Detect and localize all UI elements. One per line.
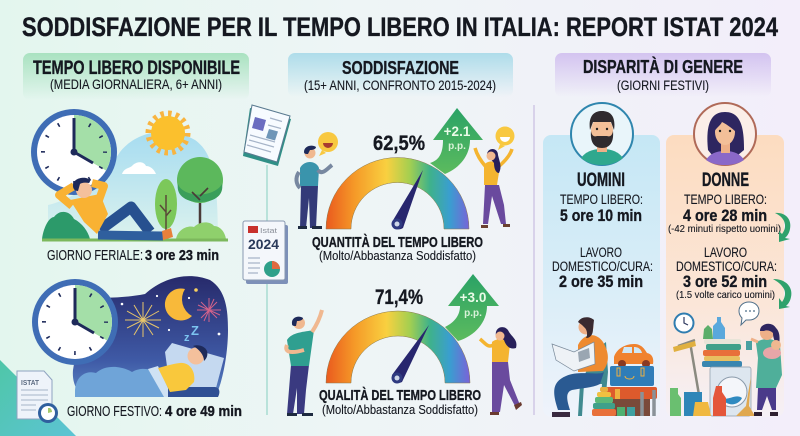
icon: clock holiday — [32, 279, 118, 365]
icon: ISTAT document: ISTAT — [21, 378, 39, 387]
arrow: +3.0 p.p.: p.p. — [464, 308, 482, 319]
card: uomini — [543, 135, 660, 417]
card: uomini: LAVORO — [580, 245, 622, 260]
label: holiday time: 4 ore 49 min — [165, 404, 242, 420]
label: qualità: QUALITÀ DEL TEMPO LIBERO — [319, 387, 481, 404]
label: holiday time: GIORNO FESTIVO: — [67, 404, 162, 420]
panel heading: disparità — [555, 53, 771, 97]
arrow: +3.0 p.p. — [445, 274, 499, 341]
icon: ISTAT document — [17, 371, 58, 423]
avatar: woman — [694, 103, 756, 165]
card: donne — [666, 135, 784, 417]
illustration: holiday night scene: Z — [191, 323, 199, 338]
arrow: domestic work gap — [773, 279, 791, 309]
gauge: qualità — [326, 311, 470, 384]
illustration: relaxing man — [59, 178, 173, 240]
panel: tempo libero disponibile — [17, 53, 249, 423]
panel heading: disparità: (GIORNI FESTIVI) — [617, 78, 709, 93]
illustration: woman with housework — [670, 302, 782, 416]
arrow: +2.1 p.p. — [430, 108, 483, 174]
card: donne: DOMESTICO/CURA: — [676, 259, 777, 274]
icon: report document — [243, 105, 291, 166]
panel heading: tempo libero: (MEDIA GIORNALIERA, 6+ ANNI) — [50, 77, 222, 92]
illustration: holiday night scene: z — [184, 332, 190, 344]
label: quantità: (Molto/Abbastanza Soddisfatto) — [319, 248, 476, 263]
panel heading: disparità: DISPARITÀ DI GENERE — [583, 56, 743, 77]
panel heading: soddisfazione: (15+ ANNI, CONFRONTO 2015-2024) — [304, 78, 496, 93]
arrow: +3.0 p.p.: +3.0 — [460, 290, 486, 305]
panel heading: soddisfazione — [288, 53, 513, 97]
card: donne: (1.5 volte carico uomini) — [676, 289, 775, 301]
panel: disparità di genere — [543, 53, 791, 417]
label: quantità: QUANTITÀ DEL TEMPO LIBERO — [312, 234, 483, 251]
gauge: quantità — [326, 158, 469, 230]
icon: Istat 2024 report: 2024 — [248, 237, 279, 252]
card: donne: 4 ore 28 min — [683, 207, 767, 225]
card: donne: TEMPO LIBERO: — [684, 192, 767, 207]
arrow: free time gap — [775, 213, 790, 242]
panel: soddisfazione — [286, 53, 522, 417]
illustration: man reading — [552, 317, 657, 417]
illustration: weekday park scene — [42, 114, 228, 240]
label: qualità: (Molto/Abbastanza Soddisfatto) — [322, 402, 478, 417]
illustration: holiday night scene — [73, 276, 228, 397]
value: 71,4%: 71,4% — [375, 286, 423, 309]
person: woman with phone — [480, 327, 522, 415]
icon: Istat 2024 report — [243, 221, 288, 284]
card: uomini: TEMPO LIBERO: — [560, 192, 643, 207]
column divider right — [533, 105, 535, 415]
illustration: sleeping man — [75, 343, 224, 397]
card: donne: (-42 minuti rispetto uomini) — [668, 224, 781, 235]
icon: Istat 2024 report: Istat — [260, 226, 278, 235]
column divider left — [266, 165, 268, 415]
card: uomini: 5 ore 10 min — [560, 207, 642, 225]
panel heading: tempo libero: TEMPO LIBERO DISPONIBILE — [33, 58, 240, 79]
arrow: +2.1 p.p.: +2.1 — [444, 124, 471, 139]
person: woman cheering — [475, 126, 514, 228]
card: donne: 3 ore 52 min — [683, 273, 767, 291]
value: 62,5%: 62,5% — [373, 132, 425, 155]
icon: clock weekday — [31, 109, 117, 195]
corner accent — [0, 360, 76, 436]
label: quantità — [312, 234, 483, 263]
person: man raising arm — [286, 310, 322, 416]
label: weekday time: GIORNO FERIALE: — [47, 248, 143, 264]
card: uomini: 2 ore 35 min — [559, 273, 643, 291]
arrow: +2.1 p.p.: p.p. — [448, 141, 466, 152]
card: donne: DONNE — [702, 170, 749, 191]
panel heading: soddisfazione: SODDISFAZIONE — [342, 57, 459, 78]
card: uomini: UOMINI — [577, 170, 625, 191]
card: donne: LAVORO — [704, 245, 747, 260]
person: man with teal sweater — [296, 132, 338, 229]
label: weekday time: 3 ore 23 min — [145, 248, 219, 264]
label: qualità — [319, 387, 481, 417]
avatar: man — [571, 103, 633, 165]
panel heading: tempo libero — [23, 53, 249, 100]
card: uomini: DOMESTICO/CURA: — [552, 259, 653, 274]
